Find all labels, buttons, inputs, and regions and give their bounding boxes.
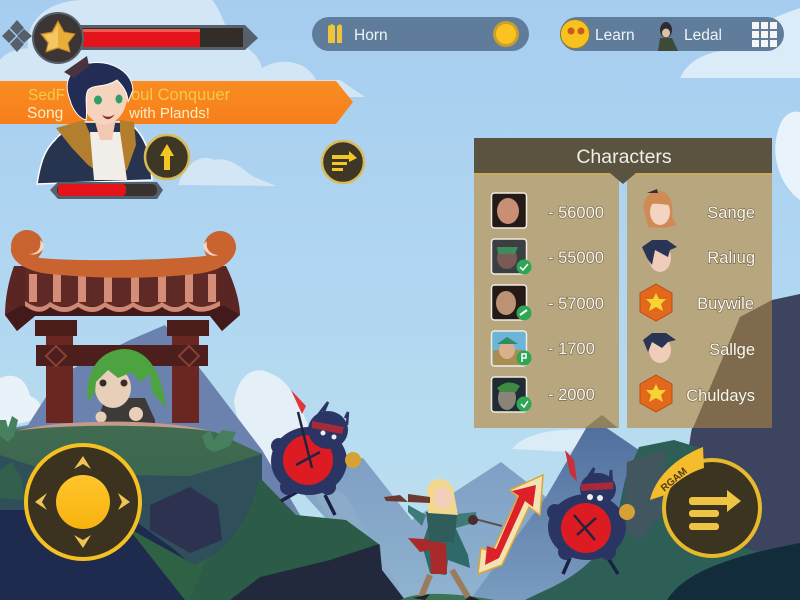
arrow and lines [689, 490, 741, 530]
row 5 right: Chuldays [686, 387, 755, 405]
joystick [26, 445, 140, 559]
panel: characters [474, 138, 772, 428]
hilltop ledge [15, 422, 210, 431]
action button [650, 447, 760, 556]
red diagonal arrow [478, 475, 543, 574]
ground under hero [400, 594, 495, 600]
shrine gate [5, 230, 240, 423]
hero swordswoman [384, 479, 502, 600]
row 4 left: - 1700 [548, 340, 595, 358]
icon: ledal avatar [658, 22, 678, 51]
row 2 left [492, 239, 604, 274]
icon: star badge [33, 13, 83, 63]
icon: learn badge [560, 20, 590, 48]
top bar: learn and ledal: Learn [595, 27, 635, 44]
clouds [0, 0, 800, 470]
green-haired character [87, 349, 166, 424]
icon: compass ornament [2, 20, 32, 52]
row 1 right [644, 189, 755, 228]
top bar: horn: Horn [354, 27, 388, 44]
orange quest banner: oul Conquuer [131, 86, 231, 104]
button: up arrow [145, 135, 189, 179]
orange quest banner: SedF [28, 87, 65, 104]
row 3 left [492, 285, 604, 320]
distant mountains [0, 325, 660, 600]
icon: gold coin [493, 21, 519, 47]
bottom right dark slope [667, 543, 800, 600]
row 2 left: - 55000 [548, 249, 604, 267]
right dark cliff [660, 294, 800, 600]
button: quest list [322, 141, 364, 183]
middle cliff [190, 478, 405, 600]
panel header [474, 138, 772, 184]
enemy right [547, 450, 635, 574]
row 3 right: Buywile [697, 295, 754, 313]
diamond ornaments [46, 346, 199, 366]
row 2 right [642, 240, 755, 272]
gate posts [35, 320, 209, 423]
panel background columns [474, 172, 772, 428]
row 4 left [492, 331, 595, 366]
enemy left [271, 390, 361, 515]
row 1 right: Sange [707, 204, 755, 222]
roof [5, 230, 240, 331]
row 5 right [640, 375, 755, 412]
row 3 left: - 57000 [548, 295, 604, 313]
row 2 right: Ralıug [707, 249, 755, 267]
hero portrait [37, 56, 152, 184]
icon: horn [328, 24, 342, 43]
top bar: horn [312, 17, 529, 51]
orange quest banner [0, 81, 353, 124]
top bar: learn and ledal [560, 17, 784, 51]
orange quest banner: with Plands! [128, 105, 210, 122]
row 1 left [492, 193, 604, 228]
right green hill [525, 440, 800, 600]
row 5 left [492, 377, 595, 412]
row 1 left: - 56000 [548, 204, 604, 222]
left hill with cave [0, 423, 262, 600]
panel header: Characters [576, 146, 672, 168]
plants [0, 416, 236, 500]
row 3 right [640, 284, 754, 321]
row 4 right [643, 333, 755, 363]
row 4 right: Sallge [709, 341, 755, 359]
top bar: learn and ledal: Ledal [684, 27, 722, 44]
hero health bar [50, 182, 163, 199]
player health bar [75, 25, 258, 50]
icon: menu grid [752, 22, 777, 47]
yellow tab with label: RGAM [659, 466, 690, 494]
row 5 left: - 2000 [548, 386, 595, 404]
orange quest banner: Song [27, 105, 63, 122]
